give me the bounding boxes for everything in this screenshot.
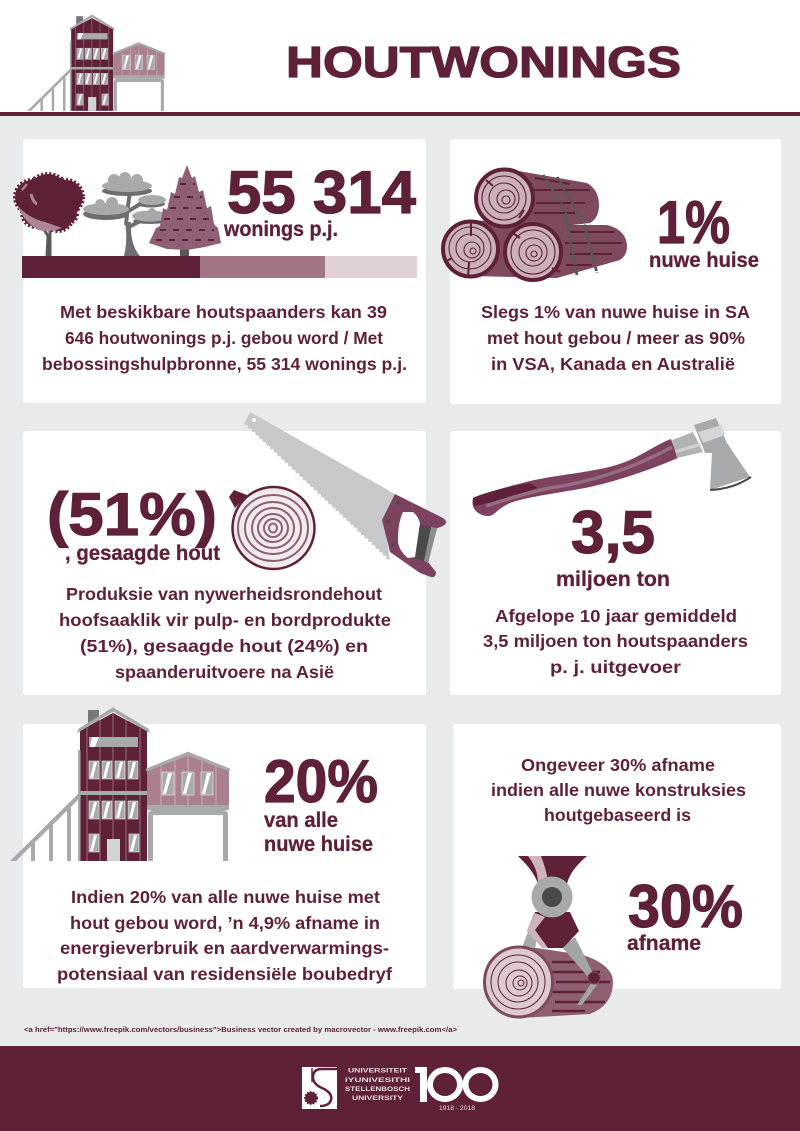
unit label <box>264 809 373 856</box>
big number: 55 314 <box>227 159 417 226</box>
attribution: <a href="https://www.freepik.com/vectors/business">Business vector created by macrovector - www.freepik.com</a> <box>24 1025 458 1034</box>
body text <box>42 302 407 374</box>
body text <box>57 887 392 984</box>
unit label: nuwe huise <box>649 249 759 272</box>
logo: university name: IYUNIVESITHI <box>345 1077 410 1084</box>
icon: fir tree <box>149 165 221 256</box>
panel: 1% new houses <box>443 139 781 404</box>
body text <box>491 755 746 825</box>
body text: 3,5 miljoen ton houtspaanders <box>483 631 748 651</box>
unit label: afname <box>627 932 701 955</box>
panel: 30% reduction <box>453 724 781 1018</box>
body text: bebossingshulpbronne, 55 314 wonings p.j. <box>42 354 407 374</box>
logo: 100 years <box>415 1067 496 1112</box>
unit label: , gesaagde hout <box>65 542 220 565</box>
body text: in VSA, Kanada en Australië <box>491 354 735 374</box>
body text: Met beskikbare houtspaanders kan 39 <box>60 302 387 322</box>
panel: 51% sawn timber <box>23 412 446 695</box>
body text <box>59 584 391 682</box>
body text: p. j. uitgevoer <box>550 657 681 677</box>
body text: Ongeveer 30% afname <box>521 755 715 775</box>
icon: grey tree <box>83 172 168 256</box>
header band <box>0 0 800 116</box>
body text: Slegs 1% van nuwe huise in SA <box>481 302 750 322</box>
icon: log grapple <box>484 856 613 1018</box>
panel: 55 314 houses <box>15 139 426 403</box>
logo: university name: STELLENBOSCH <box>345 1086 410 1093</box>
body text: hout gebou word, ’n 4,9% afname in <box>70 913 380 933</box>
icon: header house <box>27 15 165 111</box>
body text: Produksie van nywerheidsrondehout <box>66 584 382 604</box>
icon: axe <box>472 418 751 516</box>
body text: potensiaal van residensiële boubedryf <box>57 964 392 984</box>
big number: 1% <box>657 189 730 256</box>
footer band <box>0 1046 800 1131</box>
logo: university name: UNIVERSITY <box>352 1095 404 1102</box>
body text: indien alle nuwe konstruksies <box>491 780 746 800</box>
panel: 20% of new houses <box>10 708 426 988</box>
body text: hoofsaaklik vir pulp- en bordprodukte <box>59 610 391 630</box>
body text: Indien 20% van alle nuwe huise met <box>71 887 380 907</box>
logo: university name <box>345 1068 410 1102</box>
logo: 100 years: 1918 · 2018 <box>439 1106 476 1112</box>
body text: (51%), gesaagde hout (24%) en <box>80 636 368 656</box>
logo: shield <box>302 1067 337 1109</box>
icon: stacked logs <box>443 168 627 280</box>
big number: (51%) <box>47 481 217 548</box>
body text: houtgebaseerd is <box>544 805 691 825</box>
icon: saw <box>245 412 446 577</box>
logo: university name: UNIVERSITEIT <box>348 1068 407 1074</box>
panel: 3,5 million tons <box>450 418 781 695</box>
title: HOUTWONINGS <box>286 38 681 87</box>
body text: energieverbruik en aardverwarmings- <box>60 938 389 958</box>
unit label: van alle <box>264 809 338 832</box>
progress bar <box>22 256 417 278</box>
unit label: wonings p.j. <box>223 218 338 241</box>
body text: Afgelope 10 jaar gemiddeld <box>495 606 737 626</box>
icon: log cross-section <box>229 487 314 569</box>
body text <box>483 606 748 677</box>
icon: maroon tree <box>15 174 83 256</box>
big number: 30% <box>628 873 743 940</box>
big number: 20% <box>264 748 378 815</box>
icon: wooden house <box>10 708 230 861</box>
big number: 3,5 <box>571 499 655 566</box>
unit label: nuwe huise <box>264 833 373 856</box>
body text: met hout gebou / meer as 90% <box>487 328 745 348</box>
body text <box>481 302 750 374</box>
body text: spaanderuitvoere na Asië <box>115 662 334 682</box>
unit label: miljoen ton <box>556 568 670 591</box>
body text: 646 houtwonings p.j. gebou word / Met <box>65 328 383 348</box>
